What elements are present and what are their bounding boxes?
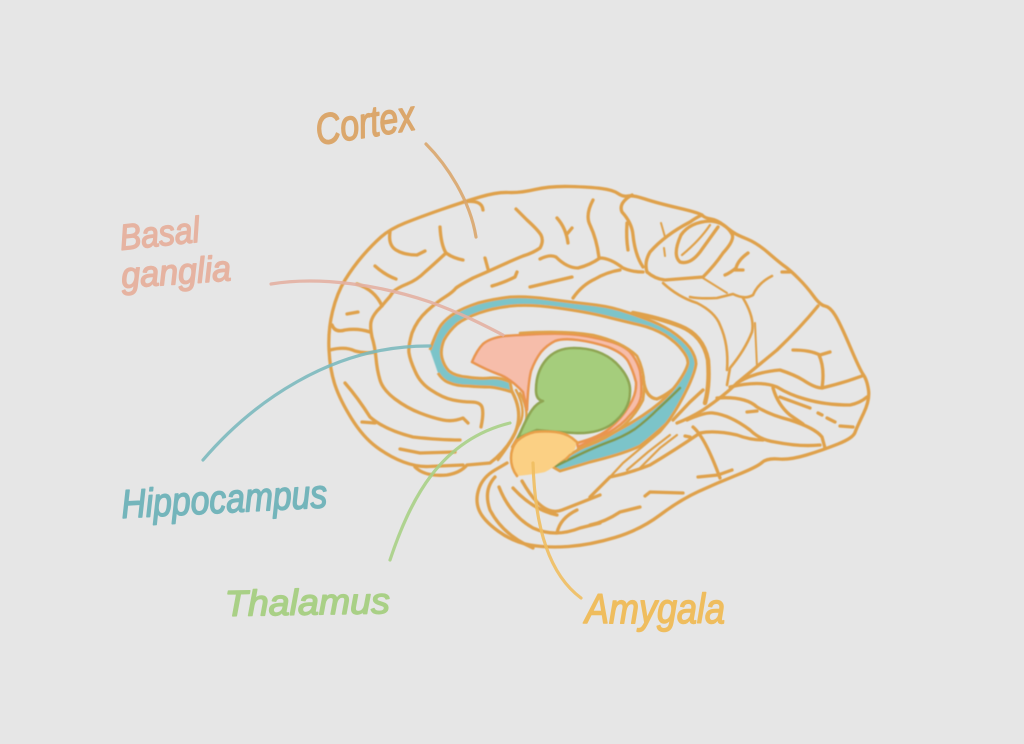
leader line: hippocampus [203,346,430,460]
label: cortex: Cortex [312,92,419,155]
cortex outline and folds [329,186,869,548]
amygdala region [511,432,578,476]
brain diagram [329,186,869,548]
label: basal ganglia: Basal [118,209,202,258]
leader line: basal ganglia [271,281,503,335]
label: basal ganglia [118,209,232,296]
leader line: cortex [426,144,476,237]
label: basal ganglia: ganglia [120,247,232,296]
basal ganglia region [472,332,644,449]
hippocampus band [430,297,696,471]
label: hippocampus: Hippocampus [120,472,328,527]
label: thalamus: Thalamus [224,580,390,624]
label: amygala: Amygala [582,585,725,632]
thalamus region [518,348,630,438]
leader line: thalamus [390,423,510,560]
leader line: amygdala [533,463,581,598]
